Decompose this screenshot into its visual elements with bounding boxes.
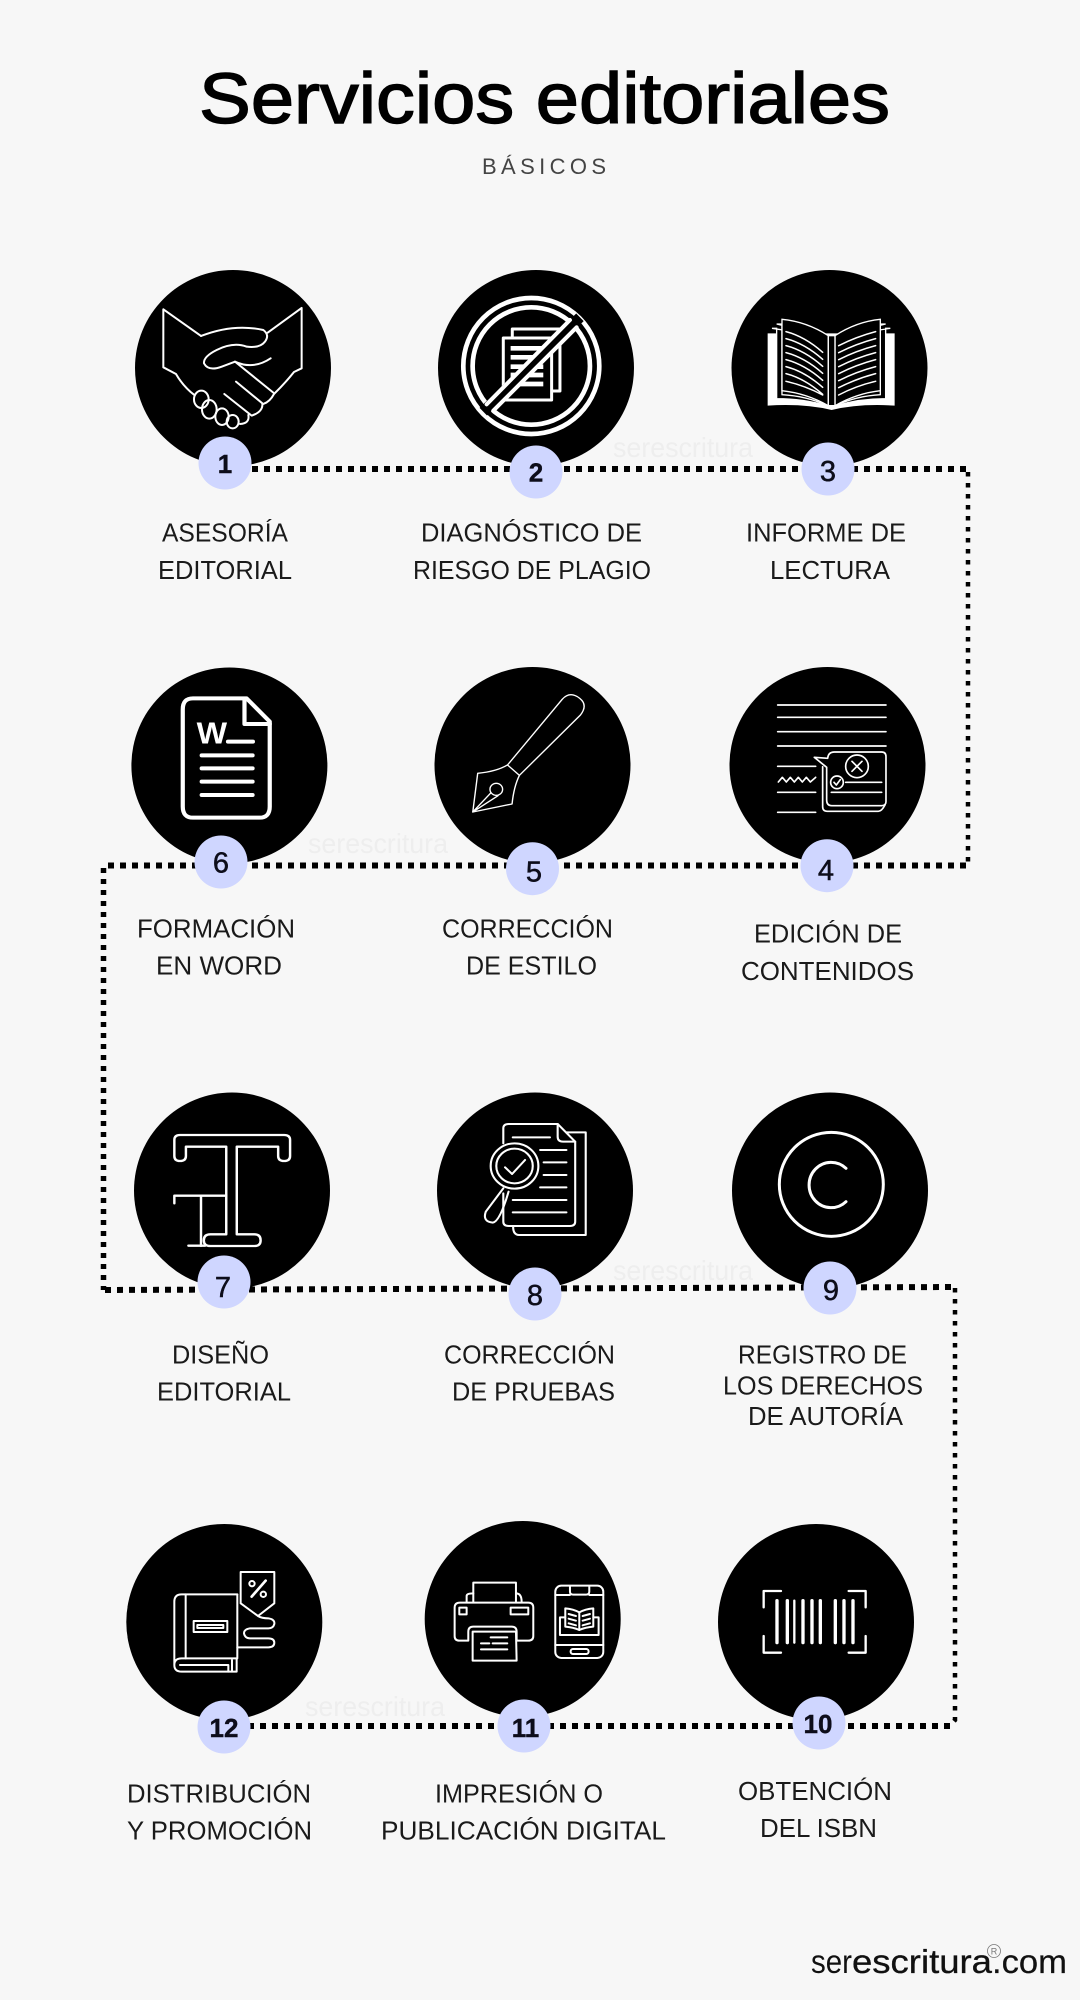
footer brand logo: R	[991, 1946, 998, 1956]
watermarks: serescritura	[613, 1255, 753, 1286]
icon circle	[732, 270, 928, 466]
watermarks	[305, 432, 753, 1722]
label	[723, 1339, 923, 1431]
label	[738, 1776, 892, 1843]
label: DE PRUEBAS	[452, 1376, 615, 1406]
number badge: 9	[823, 1275, 839, 1307]
label	[127, 1778, 312, 1845]
icon circle	[126, 1524, 322, 1720]
icon: fountain pen	[473, 695, 584, 812]
label	[413, 518, 651, 585]
icon: printer and phone	[455, 1583, 603, 1661]
label	[158, 518, 292, 585]
number badge: 11	[512, 1713, 539, 1743]
number badge: 5	[526, 857, 542, 889]
number badge: 2	[529, 458, 543, 488]
footer brand logo: ser	[811, 1943, 852, 1980]
step 11: impresión o publicación digital	[381, 1521, 666, 1845]
icon circle	[425, 1521, 621, 1717]
label: EN WORD	[156, 950, 282, 980]
step 6: formación en word	[131, 668, 327, 980]
icon circle	[434, 667, 630, 863]
label	[137, 913, 295, 980]
label: CORRECCIÓN	[444, 1339, 615, 1369]
footer brand logo: escritura	[852, 1943, 993, 1980]
icon circle	[718, 1524, 914, 1720]
icon circle	[437, 1092, 633, 1288]
step 4: edición de contenidos	[730, 667, 926, 986]
number badge	[804, 1262, 856, 1314]
label: INFORME DE	[746, 518, 906, 548]
label	[157, 1339, 291, 1406]
icon: no plagiarism	[463, 298, 599, 434]
number badge	[506, 842, 559, 895]
label: EDITORIAL	[158, 555, 292, 585]
step 2: diagnóstico de riesgo de plagio	[413, 270, 651, 585]
icon circle	[732, 1092, 928, 1288]
label: FORMACIÓN	[137, 913, 295, 943]
label	[381, 1778, 666, 1845]
icon: book and discount tag	[174, 1572, 274, 1672]
label	[741, 919, 914, 986]
label: EDICIÓN DE	[754, 919, 902, 949]
footer brand logo: .com	[992, 1943, 1067, 1980]
number badge: 8	[527, 1280, 543, 1312]
step 12: distribución y promoción	[126, 1524, 322, 1845]
number badge: 7	[215, 1272, 231, 1304]
number badge: 10	[804, 1709, 832, 1739]
number badge	[510, 446, 562, 498]
label: Y PROMOCIÓN	[127, 1815, 312, 1845]
step 7: diseño editorial	[134, 1092, 330, 1406]
label: DISTRIBUCIÓN	[127, 1778, 311, 1808]
label: RIESGO DE PLAGIO	[413, 555, 651, 585]
number badge: 3	[820, 456, 836, 488]
watermarks: serescritura	[305, 1691, 445, 1722]
number badge: 12	[210, 1713, 238, 1743]
number badge	[792, 1696, 846, 1750]
icon: barcode	[764, 1591, 866, 1653]
label	[444, 1339, 615, 1406]
label: REGISTRO DE	[738, 1339, 907, 1369]
label: CONTENIDOS	[741, 956, 914, 986]
number badge	[198, 1700, 250, 1754]
number badge	[508, 1268, 562, 1320]
subtitle: BÁSICOS	[482, 154, 606, 179]
number badge: 1	[218, 449, 232, 479]
label: EDITORIAL	[157, 1376, 291, 1406]
number badge	[498, 1700, 550, 1752]
footer brand logo	[811, 1943, 1067, 1980]
number badge	[194, 836, 248, 888]
icon: typography T	[174, 1135, 290, 1246]
icon circle	[438, 270, 634, 466]
icon circle	[730, 667, 926, 863]
icon: word document	[183, 698, 270, 818]
dotted connector path	[104, 469, 968, 1726]
title: Servicios editoriales	[199, 60, 890, 139]
label: CORRECCIÓN	[442, 913, 613, 943]
label: LECTURA	[770, 555, 891, 585]
label: IMPRESIÓN O	[435, 1778, 603, 1808]
step 10: obtención del isbn	[718, 1524, 914, 1843]
label: ASESORÍA	[162, 518, 289, 548]
label: DE ESTILO	[466, 950, 597, 980]
icon circle	[131, 668, 327, 864]
icon: word document: W	[197, 716, 227, 750]
step 1: asesoría editorial	[135, 270, 331, 585]
label: OBTENCIÓN	[738, 1776, 892, 1806]
icon circle	[134, 1092, 330, 1288]
number badge	[198, 436, 252, 490]
number badge	[198, 1256, 250, 1308]
step 3: informe de lectura	[732, 270, 928, 585]
label: DIAGNÓSTICO DE	[421, 518, 642, 548]
label: DEL ISBN	[760, 1813, 877, 1843]
icon: proofreading document	[485, 1124, 586, 1235]
label: DE AUTORÍA	[748, 1401, 904, 1431]
number badge	[802, 442, 854, 496]
label: PUBLICACIÓN DIGITAL	[381, 1815, 666, 1845]
icon circle	[135, 270, 331, 466]
icon: copyright	[779, 1132, 883, 1236]
watermarks: serescritura	[613, 432, 753, 463]
step 5: corrección de estilo	[434, 667, 630, 980]
label	[746, 518, 906, 585]
number badge: 4	[818, 855, 834, 887]
step 9: registro de los derechos de autoría	[723, 1092, 928, 1431]
step 8: corrección de pruebas	[437, 1092, 633, 1406]
label: DISEÑO	[172, 1339, 269, 1369]
label	[442, 913, 613, 980]
icon: text review	[778, 705, 886, 812]
label: LOS DERECHOS	[723, 1370, 923, 1400]
number badge: 6	[213, 848, 229, 880]
number badge	[800, 839, 854, 892]
watermarks: serescritura	[308, 828, 448, 859]
icon: handshake	[163, 308, 302, 428]
icon: open book	[768, 319, 895, 410]
